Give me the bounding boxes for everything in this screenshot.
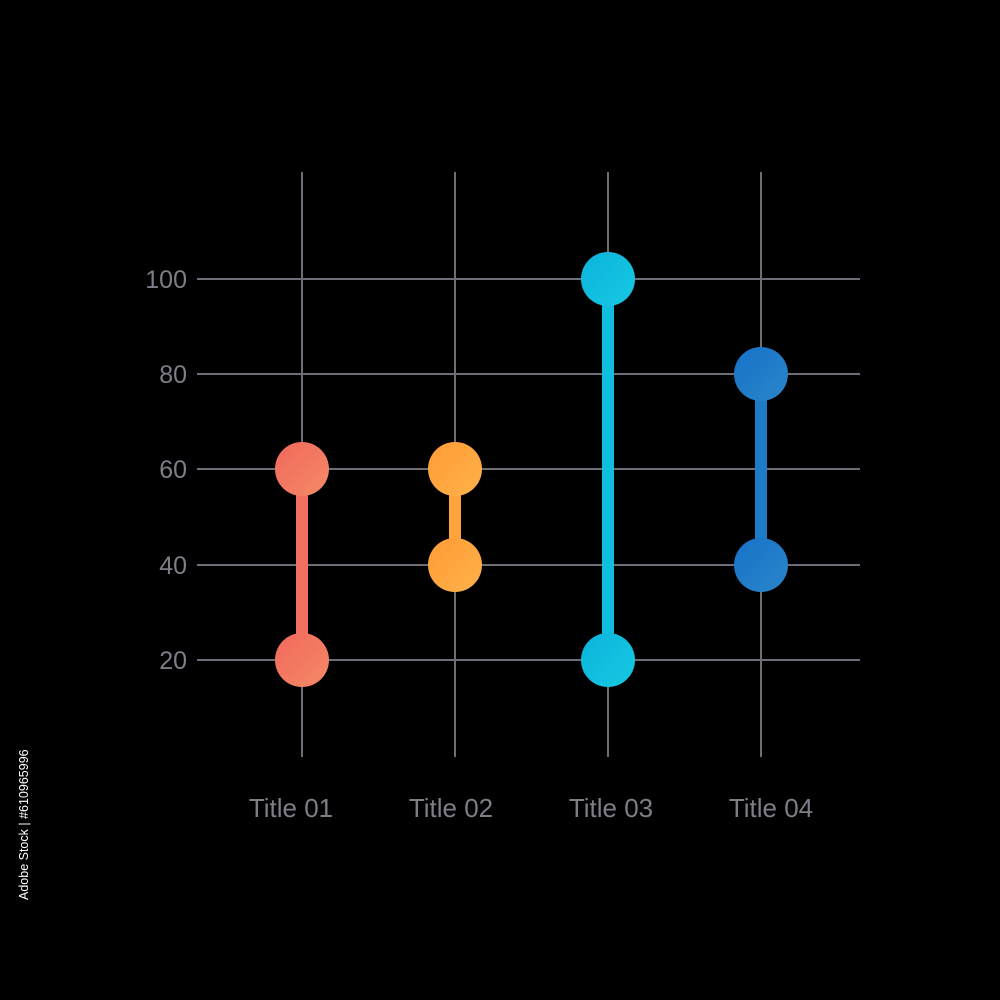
y axis labels: 80: [159, 361, 187, 389]
y axis labels: [145, 266, 187, 675]
series: Title 01: [275, 442, 329, 687]
x axis labels: Title 03: [569, 793, 653, 823]
x axis labels: Title 01: [249, 793, 333, 823]
x axis labels: Title 04: [729, 793, 813, 823]
x axis labels: Title 02: [409, 793, 493, 823]
x axis labels: [249, 793, 813, 823]
y axis labels: 100: [145, 266, 187, 294]
y axis labels: 60: [159, 456, 187, 484]
side stock id: Adobe Stock | #610965996: [17, 749, 31, 900]
series: Title 03: [581, 252, 635, 687]
y axis labels: 20: [159, 647, 187, 675]
series: Title 02: [428, 442, 482, 592]
y axis labels: 40: [159, 552, 187, 580]
series: Title 04: [734, 347, 788, 592]
